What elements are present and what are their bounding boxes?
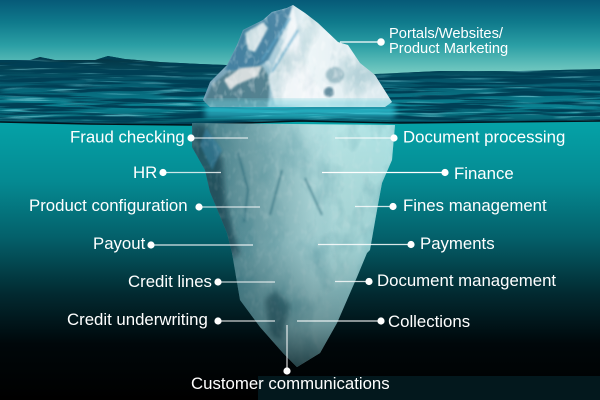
label: Collections: [297, 312, 470, 331]
label: Portals/Websites/Product Marketing: [340, 26, 508, 57]
label: Fraud checking: Fraud checking: [70, 128, 185, 146]
label: Customer communications: [191, 325, 390, 393]
background: sky: [0, 0, 600, 75]
label: Fraud checking: [70, 128, 248, 146]
label: Payout: [93, 234, 253, 253]
label: Finance: Finance: [454, 164, 514, 183]
iceberg below water: [190, 120, 400, 370]
label: Portals/Websites/Product Marketing: Portals/Websites/: [389, 26, 504, 42]
label: Finance: [322, 164, 514, 183]
label: Credit lines: Credit lines: [128, 272, 212, 291]
iceberg above water: [203, 5, 392, 107]
label: Portals/Websites/Product Marketing: Product Marketing: [389, 41, 508, 57]
bottom label band: [258, 376, 600, 400]
label: Credit lines: [128, 272, 275, 291]
label: Document management: Document management: [377, 271, 556, 290]
label: Fines management: Fines management: [403, 196, 547, 215]
background: underwater gradient: [0, 120, 600, 400]
waterline: [0, 121, 600, 125]
sea surface: [0, 55, 600, 127]
label: Document processing: Document processing: [403, 128, 565, 146]
label: HR: HR: [133, 163, 157, 182]
label: Payout: Payout: [93, 234, 146, 253]
label: Payments: [318, 234, 495, 253]
label: Customer communications: Customer communications: [191, 374, 390, 393]
label: Product configuration: Product configuration: [29, 196, 188, 215]
label: Credit underwriting: [67, 310, 275, 329]
label: Payments: Payments: [420, 234, 495, 253]
label: Product configuration: [29, 196, 260, 215]
label: Collections: Collections: [388, 312, 470, 331]
label: HR: [133, 163, 221, 182]
label: Credit underwriting: Credit underwriting: [67, 310, 208, 329]
